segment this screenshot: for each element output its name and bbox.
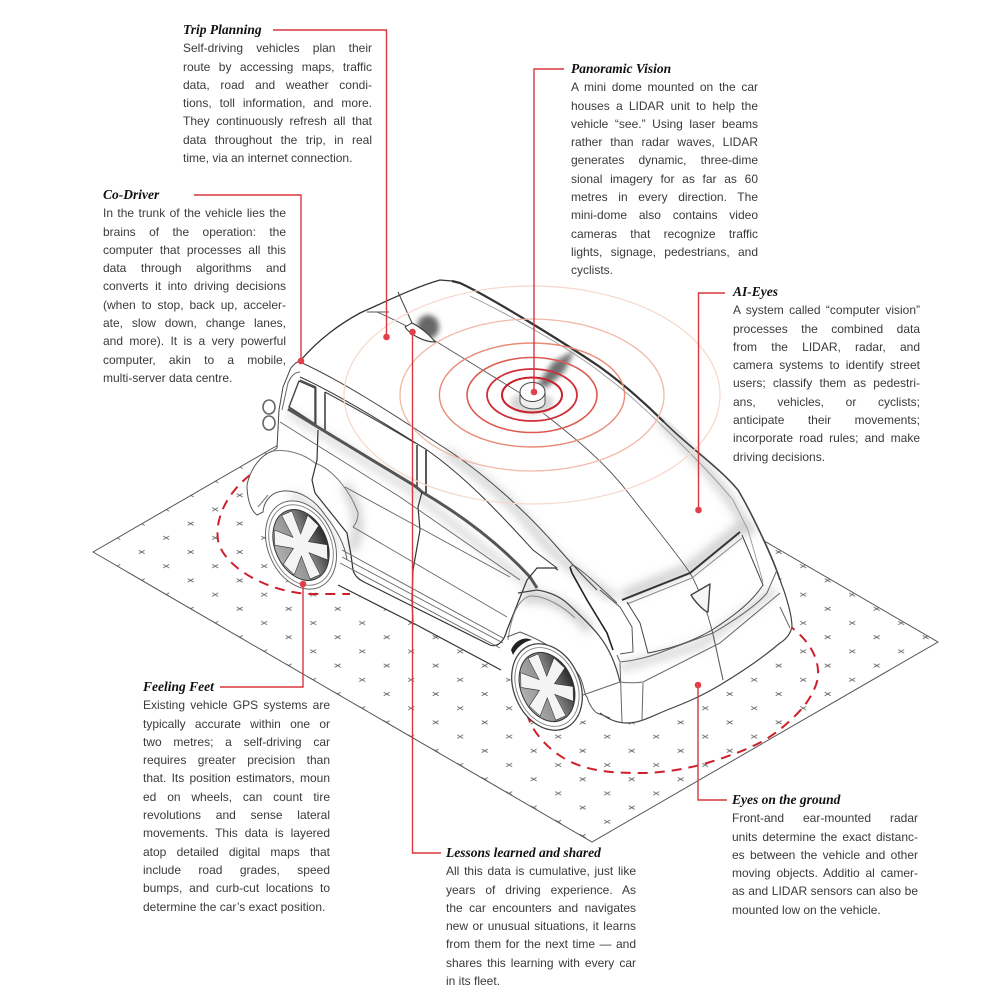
text block: Lessons learned and shared: the car encounters and navigates bbox=[446, 901, 636, 915]
belt line bbox=[288, 409, 537, 588]
text block: Feeling Feet: bumps, and curb-cut locations to bbox=[143, 881, 330, 895]
front wheel arch shadow bbox=[511, 638, 532, 655]
text block: Feeling Feet: atop detailed digital maps that bbox=[143, 845, 330, 859]
text block: Panoramic Vision: mini-dome also contains video bbox=[571, 208, 758, 222]
emblem triangle bbox=[691, 584, 710, 612]
text block: Lessons learned and shared: shares this learning with every car bbox=[446, 956, 636, 970]
text block: Feeling Feet: include road grades, speed bbox=[143, 863, 330, 877]
dome shadow bbox=[537, 350, 575, 388]
text block: AI-Eyes: camera systems to identify street bbox=[733, 358, 920, 372]
rear frame lines bbox=[247, 361, 597, 590]
text block: Eyes on the ground: mounted low on the vehicle. bbox=[732, 903, 881, 917]
windscreen and nose panels bbox=[600, 532, 790, 722]
text block: Feeling Feet: revolutions and sense lateral bbox=[143, 808, 330, 822]
text block: Lessons learned and shared: new or unusual situations, it learns bbox=[446, 919, 636, 933]
text block: AI-Eyes bbox=[732, 284, 920, 464]
text block: Co-Driver: and more). It is a very powerful bbox=[103, 334, 286, 348]
text block: Co-Driver: converts it into driving decisions bbox=[103, 279, 286, 293]
text block: AI-Eyes: incorporate road rules; and make bbox=[733, 431, 920, 445]
text block: Feeling Feet: typically accurate within one or bbox=[143, 717, 330, 731]
rear wheel bbox=[252, 490, 350, 600]
text block: AI-Eyes: from the LIDAR, radar, and bbox=[733, 340, 920, 354]
heading: Co-Driver: Co-Driver bbox=[103, 187, 159, 202]
front fender and slot bbox=[507, 565, 620, 718]
tail lights bbox=[263, 400, 275, 430]
text block: Feeling Feet: determine the car’s exact position. bbox=[143, 900, 325, 914]
text block: Eyes on the ground: as and LIDAR sensors can also be bbox=[732, 884, 918, 898]
mirror and roof centre line bbox=[367, 312, 723, 680]
text block: Feeling Feet: two metres; a self-driving car bbox=[143, 735, 330, 749]
text block: Eyes on the ground: moving objects. Additio al camer- bbox=[732, 866, 918, 880]
heading: Trip Planning: Trip Planning bbox=[183, 22, 262, 37]
text block: Co-Driver: brains of the operation: the bbox=[103, 225, 286, 239]
illustration: self-driving car on ground plane bbox=[92, 29, 939, 854]
text block: Trip Planning: data, road and weather condi- bbox=[183, 78, 372, 92]
leader: Feeling Feet bbox=[220, 581, 306, 687]
leader: Lessons learned bbox=[409, 329, 441, 853]
rear radar dashed range bbox=[217, 475, 350, 594]
text block: Co-Driver: computer, akin to a mobile, bbox=[103, 353, 286, 367]
text block: Lessons learned and shared: from them for the next time — and bbox=[446, 937, 636, 951]
text block: Trip Planning: They continuously refresh all that bbox=[183, 114, 372, 128]
text block: Eyes on the ground bbox=[732, 792, 918, 917]
far roof edge bbox=[452, 281, 792, 723]
ground plane with x-mark grid bbox=[93, 352, 938, 842]
text block: Co-Driver: ate, slow down, change lanes, bbox=[103, 316, 286, 330]
text block: Trip Planning: data throughout the trip, in real bbox=[183, 133, 372, 147]
text block: AI-Eyes: anticipate their movements; bbox=[733, 413, 920, 427]
text block: Co-Driver: data through algorithms and bbox=[103, 261, 286, 275]
text block: Co-Driver: (when to stop, back up, acceler- bbox=[103, 298, 286, 312]
LIDAR mini dome bbox=[520, 382, 545, 409]
text block: Panoramic Vision: metres in every direction. The bbox=[571, 190, 758, 204]
text block: Panoramic Vision: cyclists. bbox=[571, 263, 613, 277]
text block: Panoramic Vision: sional imagery for as far as 60 bbox=[571, 172, 758, 186]
text block: AI-Eyes: users; classify them as pedestri- bbox=[733, 376, 920, 390]
text block: Panoramic Vision bbox=[571, 61, 758, 277]
text block: Feeling Feet: requires greater precision than bbox=[143, 753, 330, 767]
text block: Panoramic Vision: rather than radar waves, LIDAR bbox=[571, 135, 758, 149]
soft base under dome bbox=[510, 392, 554, 414]
leader: Co-Driver bbox=[194, 195, 304, 364]
text block: Lessons learned and shared bbox=[446, 845, 636, 988]
text block: Panoramic Vision: A mini dome mounted on the car bbox=[571, 80, 758, 94]
text block: Co-Driver: In the trunk of the vehicle lies the bbox=[103, 206, 286, 220]
leader: Trip Planning bbox=[273, 30, 390, 340]
top roof outline bbox=[300, 280, 452, 361]
text block: Feeling Feet bbox=[143, 679, 330, 914]
text block: Panoramic Vision: houses a LIDAR unit to help the bbox=[571, 99, 758, 113]
text block: Feeling Feet: movements. This data is layered bbox=[143, 826, 330, 840]
text block: Trip Planning: time, via an internet connection. bbox=[183, 151, 352, 165]
text block: Panoramic Vision: vehicle “see.” Using laser beams bbox=[571, 117, 758, 131]
text block: Trip Planning: route by accessing maps, traffic bbox=[183, 60, 372, 74]
text block: Panoramic Vision: cameras that recognize traffic bbox=[571, 227, 758, 241]
text block: Eyes on the ground: es between the vehicle and other bbox=[732, 848, 918, 862]
small antenna dome bbox=[398, 292, 435, 342]
text block: Eyes on the ground: units determine the exact distanc- bbox=[732, 830, 918, 844]
heading: Panoramic Vision: Panoramic Vision bbox=[571, 61, 671, 76]
text block: Trip Planning: Self-driving vehicles plan their bbox=[183, 41, 372, 55]
LIDAR range rings bbox=[344, 286, 720, 504]
heading: Eyes on the ground: Eyes on the ground bbox=[732, 792, 840, 807]
heading: Lessons learned and shared: Lessons learned and shared bbox=[446, 845, 601, 860]
text block: Lessons learned and shared: All this data is cumulative, just like bbox=[446, 864, 636, 878]
text block: Co-Driver: multi-server data centre. bbox=[103, 371, 232, 385]
text block: Panoramic Vision: lights, signage, pedestrians, and bbox=[571, 245, 758, 259]
text block: Eyes on the ground: Front-and ear-mounted radar bbox=[732, 811, 918, 825]
soft shading bbox=[288, 412, 775, 668]
text block: AI-Eyes: driving decisions. bbox=[733, 450, 825, 464]
text block: AI-Eyes: processes the combined data bbox=[733, 322, 920, 336]
front wheel bbox=[499, 632, 595, 742]
front radar dashed range bbox=[527, 627, 818, 773]
text block: Co-Driver bbox=[103, 187, 286, 385]
text block: Lessons learned and shared: years of driving experience. As bbox=[446, 883, 636, 897]
text block: Lessons learned and shared: in its fleet. bbox=[446, 974, 500, 988]
heading: Feeling Feet: Feeling Feet bbox=[143, 679, 214, 694]
text block: Trip Planning bbox=[183, 22, 372, 165]
heading: AI-Eyes: AI-Eyes bbox=[733, 284, 778, 299]
text block: Feeling Feet: Existing vehicle GPS systems are bbox=[143, 698, 330, 712]
leader: Eyes on the ground bbox=[695, 682, 727, 800]
leader: AI-Eyes bbox=[695, 293, 725, 513]
car body bbox=[247, 280, 792, 742]
door and side creases bbox=[280, 422, 558, 670]
text block: AI-Eyes: A system called “computer vision” bbox=[733, 303, 920, 317]
text block: Panoramic Vision: generates dynamic, three-dime bbox=[571, 153, 758, 167]
text block: AI-Eyes: ans, vehicles, or cyclists; bbox=[733, 395, 920, 409]
windows bbox=[289, 380, 426, 493]
text block: Feeling Feet: ed on wheels, can count tire bbox=[143, 790, 330, 804]
leader: Panoramic Vision bbox=[531, 69, 564, 395]
text block: Feeling Feet: that. Its position estimators, moun bbox=[143, 771, 330, 785]
text block: Co-Driver: computer that processes all this bbox=[103, 243, 286, 257]
antenna shadow bbox=[417, 315, 439, 339]
text block: Trip Planning: tions, toll information, and more. bbox=[183, 96, 372, 110]
